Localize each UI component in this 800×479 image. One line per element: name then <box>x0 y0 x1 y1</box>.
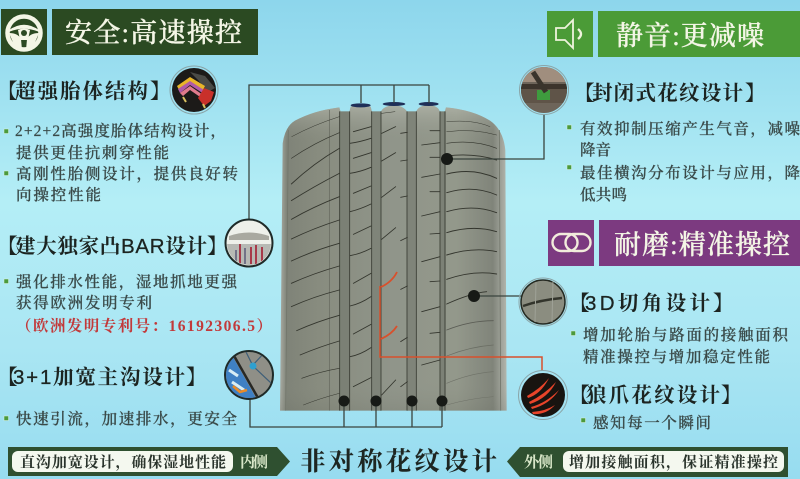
bullet list <box>4 272 238 312</box>
bullet list: 降音 <box>580 141 611 159</box>
heading: wolf claw: 】 <box>721 384 742 407</box>
tire <box>280 102 507 411</box>
panel: closed pattern <box>520 66 800 204</box>
icon: steering wheel <box>1 9 47 55</box>
banner: inner side: 直沟加宽设计，确保湿地性能 <box>20 453 226 472</box>
heading: 3D chamfer: 】 <box>713 292 734 315</box>
connector: main grooves <box>250 396 448 427</box>
heading: safety <box>52 9 258 55</box>
patent number: （欧洲发明专利号：16192306.5） <box>16 316 272 335</box>
heading: quiet: 静音:更减噪 <box>616 21 764 51</box>
banner: inner side <box>8 447 290 476</box>
bullet list: 获得欧洲发明专利 <box>16 293 152 312</box>
panel: main groove <box>0 351 273 428</box>
bullet list: 强化排水性能，湿地抓地更强 <box>16 272 238 291</box>
heading: main groove: 3+1加宽主沟设计 <box>13 365 186 389</box>
icon: groove water <box>225 351 273 399</box>
heading: closed pattern: 封闭式花纹设计 <box>592 81 744 105</box>
heading: 3D chamfer: 【 <box>569 292 590 315</box>
connector: closed pattern <box>441 114 544 165</box>
bullet: 感知每一个瞬间 <box>593 414 711 432</box>
panel: wolf claw <box>518 370 742 432</box>
heading: tire structure: 超强胎体结构 <box>15 79 148 103</box>
tire grooves <box>286 110 501 411</box>
icon: tire cross section <box>170 66 218 114</box>
banner: inner side: 内侧 <box>240 453 268 471</box>
bullet: 快速引流，加速排水，更安全 <box>16 409 237 428</box>
tread sipes right shoulder <box>447 121 497 405</box>
banner: outer side: 增加接触面积，保证精准操控 <box>569 453 778 472</box>
icon: wolf claw <box>518 370 568 420</box>
heading: quiet <box>598 11 800 57</box>
heading: safety: 安全:高速操控 <box>65 18 242 48</box>
panel: tire structure <box>0 66 238 204</box>
heading: wolf claw: 【 <box>569 384 590 407</box>
icon: speaker <box>547 11 593 57</box>
connector: 3D chamfer <box>468 290 521 302</box>
panel: BAR design <box>0 220 272 335</box>
bullet list: 增加轮胎与路面的接触面积 <box>583 326 789 344</box>
bullet list: 最佳横沟分布设计与应用，降 <box>580 164 800 182</box>
blue tread caps <box>351 102 439 107</box>
connector: wolf claw in red <box>380 272 542 371</box>
heading: 3D chamfer: 3D切角设计 <box>585 292 710 315</box>
connector: structure to top of tire <box>249 85 429 220</box>
heading: wear <box>599 220 800 266</box>
bullet list: 有效抑制压缩产生气音，减噪 <box>580 119 800 138</box>
bullet list: 精准操控与增加稳定性能 <box>583 348 770 366</box>
heading: wear: 耐磨:精准操控 <box>614 230 790 260</box>
bullet list: 向操控性能 <box>16 186 101 204</box>
tread sipes rib 3 <box>382 112 407 395</box>
heading: asymmetric tread: 非对称花纹设计 <box>300 447 497 476</box>
tread sipes left shoulder <box>291 117 339 405</box>
heading: wolf claw: 狼爪花纹设计 <box>586 383 720 407</box>
banner: outer side: 外侧 <box>524 454 553 471</box>
bullet list <box>571 326 789 366</box>
icon: chamfer sipe <box>519 278 567 326</box>
bullet list: 2+2+2高强度胎体结构设计， <box>15 121 226 140</box>
bullet list: 低共鸣 <box>580 186 627 204</box>
bullet list: 提供更佳抗刺穿性能 <box>16 143 169 162</box>
heading: tire structure: 】 <box>150 80 170 103</box>
heading: closed pattern: 【 <box>574 82 594 105</box>
icon: closed groove <box>520 66 568 114</box>
bullet list <box>567 119 800 204</box>
banner: outer side <box>507 447 788 477</box>
heading: BAR design: 建大独家凸BAR设计 <box>15 234 208 258</box>
panel: 3D chamfer <box>519 278 789 366</box>
bullet list <box>4 121 238 204</box>
icon: chain links <box>548 220 594 266</box>
heading: closed pattern: 】 <box>745 82 766 105</box>
heading: BAR design: 】 <box>207 235 228 258</box>
bullet list: 高刚性胎侧设计，提供良好转 <box>16 164 238 183</box>
tread sipes rib 2 <box>350 127 371 387</box>
icon: BAR section <box>226 220 272 268</box>
heading: main groove: 】 <box>186 366 206 389</box>
tread sipes rib 4 <box>422 131 440 365</box>
